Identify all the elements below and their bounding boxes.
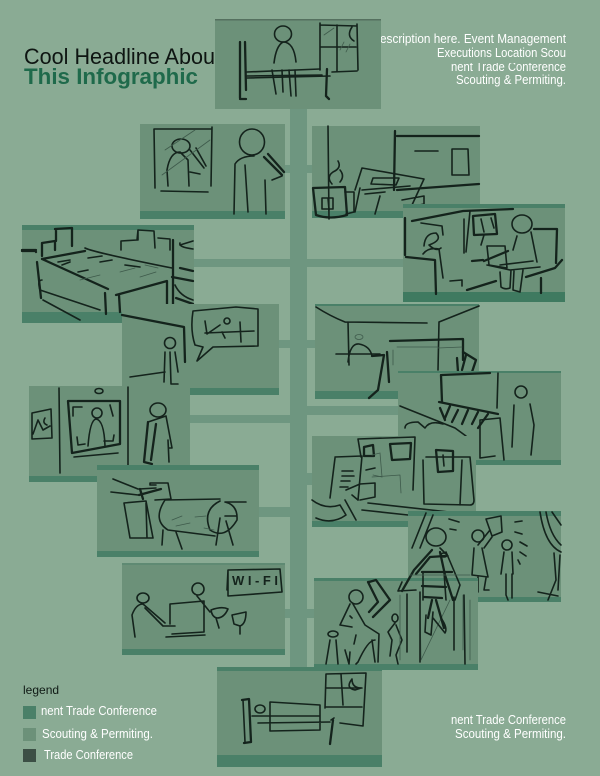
legend: legend	[23, 683, 59, 697]
description text top right: Scouting & Permiting.	[456, 72, 566, 87]
title: Cool Headline Abou	[24, 44, 215, 69]
panel: street perspective and skyline	[22, 225, 194, 323]
panel: person sitting on bed	[215, 19, 381, 109]
figure: performer on ladder overlapping panels	[398, 528, 470, 635]
title: This Infographic	[24, 64, 198, 89]
bottom right text: Scouting & Permiting.	[455, 726, 566, 741]
panel: food truck	[97, 465, 259, 557]
description text top right: escription here. Event Management	[380, 31, 566, 46]
panel: camera frame and person	[29, 386, 190, 482]
panel: poster and person	[140, 124, 285, 219]
panel: crowd below performer	[314, 578, 478, 670]
description text top right: nent Trade Conference	[451, 59, 566, 74]
description text top right: Executions Location Scou	[437, 45, 566, 60]
legend	[23, 683, 157, 762]
bottom right text: nent Trade Conference	[451, 712, 566, 727]
tree spine with branches	[185, 105, 410, 670]
panel: curtain with people	[408, 511, 561, 602]
panel: stage with performer	[315, 304, 479, 399]
title	[24, 44, 215, 89]
sketched wifi sign: WI-FI	[232, 573, 278, 588]
panel: desk with papers and bag	[312, 436, 476, 527]
bottom right text	[451, 712, 566, 741]
panel: table with coffee mug	[312, 126, 480, 219]
description text top right	[380, 31, 570, 87]
panel: clothes rack and person	[398, 371, 561, 465]
panel: person with speech bubble map	[122, 304, 279, 395]
panel: bed with moon window	[217, 667, 382, 767]
panel: wifi reception desk	[122, 563, 285, 655]
panel: person with laptop	[403, 204, 565, 302]
legend item 1: nent Trade Conference	[41, 703, 157, 718]
legend item 3: Trade Conference	[44, 747, 133, 762]
legend item 2: Scouting & Permiting.	[42, 726, 153, 741]
